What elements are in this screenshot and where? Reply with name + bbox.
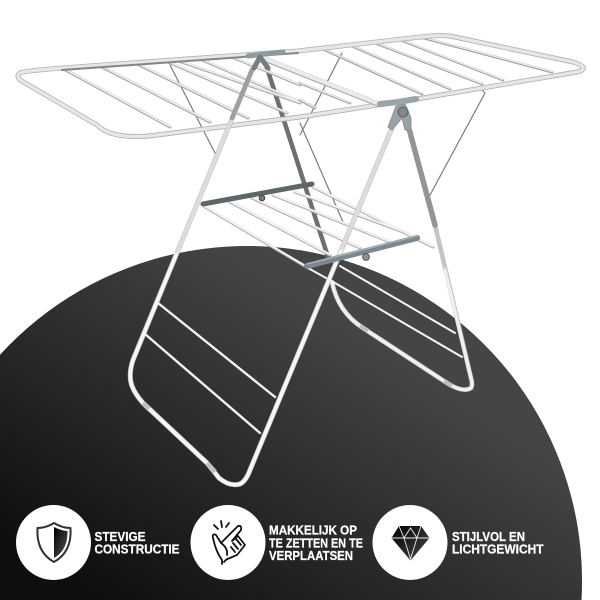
feature: sturdy construction <box>16 505 180 580</box>
leg rungs <box>145 303 275 433</box>
label: stijlvol en lichtgewicht: LICHTGEWICHT <box>452 542 544 556</box>
label: stevige constructie: STEVIGE <box>94 529 146 544</box>
rear legs <box>267 68 472 390</box>
top rack left wing bars <box>62 56 300 127</box>
icon: shield <box>16 505 91 580</box>
shelf front bar <box>307 236 417 266</box>
label: stijlvol en lichtgewicht <box>452 529 544 556</box>
top frame rail <box>18 36 583 137</box>
centre tube <box>267 60 378 104</box>
dark circular background <box>0 246 582 600</box>
lower shelf bars <box>205 186 462 357</box>
icon: snapping hand <box>190 505 266 580</box>
label: makkelijk op te zetten en te verplaatsen: VERPLAATSEN <box>269 548 353 563</box>
label: makkelijk op te zetten en te verplaatsen: TE ZETTEN EN TE <box>269 536 363 550</box>
thin wire struts <box>170 53 485 222</box>
label: makkelijk op te zetten en te verplaatsen <box>269 522 363 563</box>
top rack right wing bars <box>300 36 552 108</box>
label: stijlvol en lichtgewicht: STIJLVOL EN <box>452 529 525 544</box>
label: stevige constructie <box>94 529 180 556</box>
front legs <box>130 70 392 485</box>
icon: diamond <box>372 505 448 580</box>
label: stevige constructie: CONSTRUCTIE <box>94 542 180 556</box>
label: makkelijk op te zetten en te verplaatsen: MAKKELIJK OP <box>269 522 357 538</box>
feature: stylish and lightweight <box>372 505 544 580</box>
shelf back bar <box>203 184 312 204</box>
drying rack <box>18 36 583 485</box>
front hinge <box>380 99 416 130</box>
feature: easy to set up and move <box>190 505 363 580</box>
rear hinge <box>248 52 283 68</box>
